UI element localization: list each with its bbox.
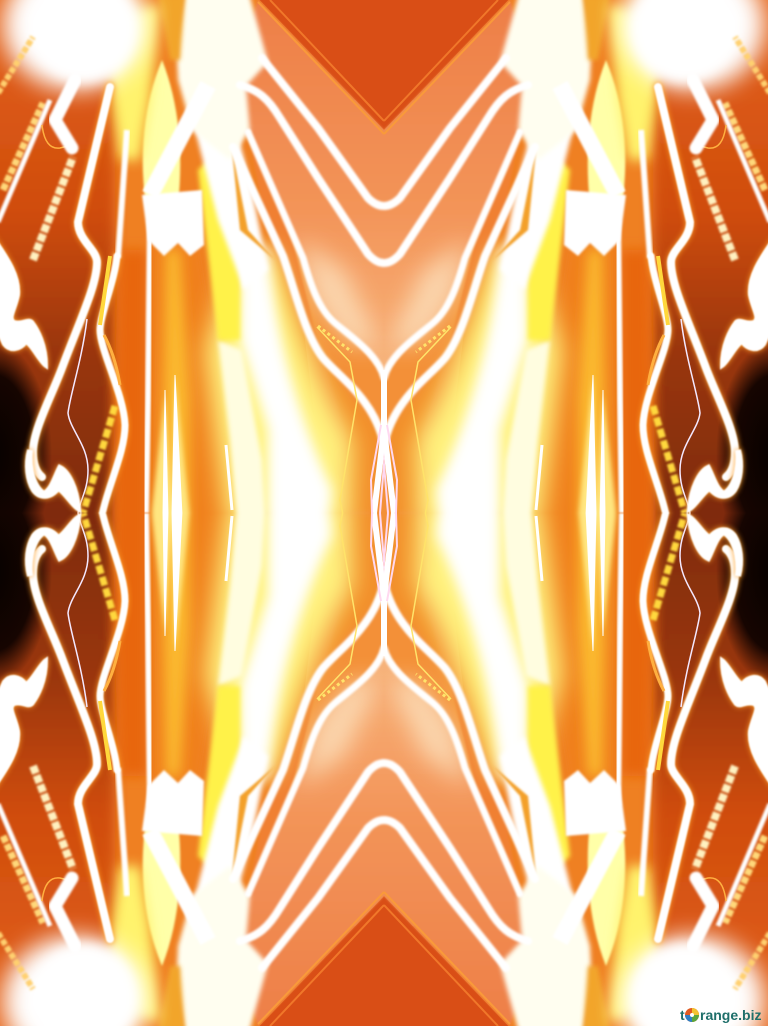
upper left white blob [0, 240, 46, 366]
yellow inner glow [160, 250, 190, 540]
lower left white blob [28, 450, 78, 508]
pale yellow lens [143, 60, 180, 205]
pale lower flare [218, 340, 266, 530]
orange inner column [155, 240, 232, 540]
yellow upper streak [100, 256, 110, 325]
yellow dotted line [83, 406, 115, 513]
black edge shadow [0, 340, 52, 570]
central white flare [240, 240, 332, 530]
watermark: range.biz [700, 1007, 761, 1023]
broad top flare [176, 0, 268, 160]
thin gold hourglass lines [317, 326, 357, 520]
pale glow over chevron base [300, 240, 378, 345]
inner spike glow [152, 375, 190, 530]
left zig-zag lines [0, 37, 150, 530]
central warm field [240, 100, 400, 540]
upper hourglass line [248, 132, 384, 378]
base orange field [0, 0, 410, 540]
far column line [146, 220, 150, 513]
bottom-left mirror [0, 456, 410, 1026]
corner white glow [3, 0, 147, 90]
gold chevron lines [258, 0, 384, 134]
white diagonal [0, 100, 50, 222]
yellow flare under corner [100, 5, 160, 160]
main zig-zag line [33, 87, 110, 477]
top chevron line [262, 58, 400, 206]
orange wedge between hourglass lines [248, 130, 384, 430]
thin violet line [68, 319, 88, 513]
bottom-right mirror [358, 456, 768, 1026]
upper white band [190, 100, 268, 290]
second zig-zag line [99, 256, 125, 530]
upper yellow band [198, 140, 240, 340]
upper column line [118, 130, 127, 258]
chevron and hourglass white lines [233, 58, 400, 445]
dark left field [0, 0, 115, 540]
top-right mirror [358, 0, 768, 570]
peach chevron band [240, 0, 400, 375]
rope line 3 [33, 157, 73, 260]
white scalloped blob [142, 190, 204, 256]
thin curl [42, 125, 72, 148]
upper diagonal white streak [150, 85, 208, 195]
top-left quadrant [0, 0, 410, 570]
second chevron line [240, 85, 400, 263]
rope line 2 [3, 103, 43, 190]
top dark chevron [250, 0, 400, 140]
watermark text: t [680, 1007, 685, 1023]
amber patch [232, 150, 275, 260]
lower loop [104, 335, 120, 385]
inner spikes [163, 375, 182, 515]
central yellow halo [205, 250, 352, 530]
watermark wheel icon [685, 1008, 699, 1022]
bright orange column [112, 250, 148, 540]
centre stem line [374, 370, 384, 513]
lower hourglass line [233, 147, 384, 445]
thin inner flare line [226, 445, 232, 510]
lower hourglass orange [325, 365, 380, 513]
rope line 1 [0, 37, 33, 93]
white small blob [55, 80, 75, 148]
pink stem highlight [371, 425, 386, 513]
